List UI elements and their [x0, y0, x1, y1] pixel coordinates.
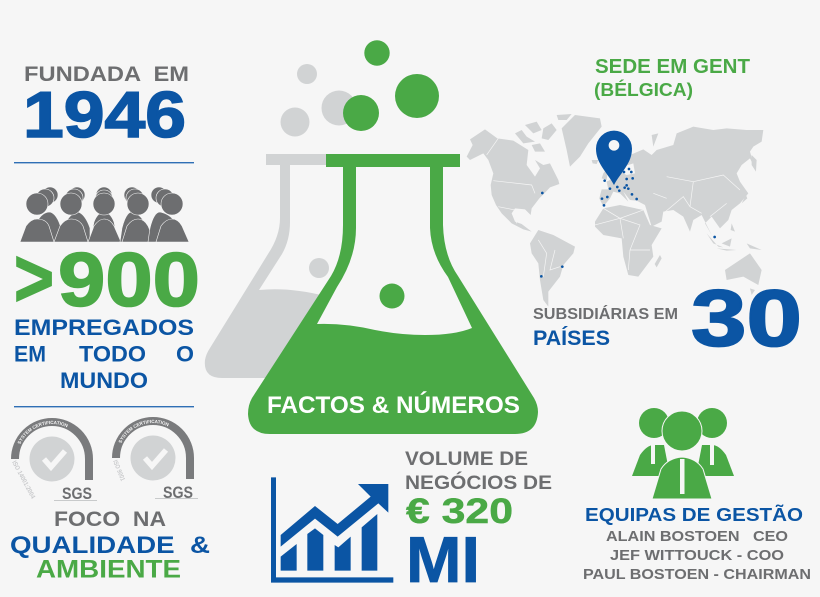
text: foco na qualidade e ambiente: QUALIDADE &	[10, 532, 210, 559]
text: subsidiarias em paises: SUBSIDIÁRIAS EM	[533, 304, 678, 323]
text: volume de negocios de: NEGÓCIOS DE	[405, 472, 552, 494]
label: factos e numeros: FACTOS & NÚMEROS	[267, 391, 520, 419]
text: volume de negocios de: VOLUME DE	[405, 449, 528, 470]
panel: employees	[14, 187, 200, 393]
icon: SGS ISO 9001 badge	[111, 417, 198, 502]
icon: SGS ISO 14001 badge	[10, 418, 97, 503]
text: empregados em todo o mundo: MUNDO	[60, 368, 148, 393]
icon: SGS ISO 9001 badge: SYSTEM CERTIFICATION	[118, 420, 169, 443]
icon: SGS ISO 14001 badge: SYSTEM CERTIFICATION	[18, 420, 68, 444]
icon: location pin	[596, 131, 632, 185]
illustration: flasks and bubbles	[205, 40, 538, 434]
text: team names: ALAIN BOSTOEN CEO	[606, 528, 788, 545]
text: team names: PAUL BOSTOEN - CHAIRMAN	[583, 566, 811, 583]
icon: green flask	[248, 154, 538, 434]
icon: SGS ISO 14001 badge: ISO 14001:2004	[10, 460, 36, 500]
bubbles: green	[343, 40, 439, 131]
heading: sede em gent: SEDE EM GENT	[595, 56, 750, 78]
map markers: subsidiaries	[540, 168, 716, 278]
number: more than 900	[14, 233, 200, 324]
number: more than 900: 900	[58, 238, 200, 323]
text: foco na qualidade e ambiente: AMBIENTE	[36, 556, 181, 584]
panel: management team	[583, 408, 811, 583]
icon: SGS ISO 14001 badge: SGS	[62, 484, 92, 503]
panel: headquarters	[467, 56, 802, 362]
text: empregados em todo o mundo: EMPREGADOS	[14, 315, 194, 340]
subheading: belgica: (BÉLGICA)	[594, 79, 693, 100]
number: 1946: 1946	[23, 78, 186, 151]
text: empregados em todo o mundo: EM	[14, 342, 46, 366]
icon: SGS ISO 9001 badge: ISO 9001	[111, 459, 126, 482]
icon: SGS ISO 9001 badge: SGS	[163, 483, 193, 502]
number: more than 900: >	[14, 233, 54, 324]
number: 320 euros: € 320	[406, 492, 513, 531]
icon: growth chart	[271, 477, 393, 583]
world map	[467, 114, 763, 307]
text: foco na qualidade e ambiente: FOCO NA	[54, 508, 166, 531]
text: subsidiarias em paises	[533, 304, 678, 350]
text: subsidiarias em paises: PAÍSES	[533, 327, 610, 350]
text: foco na qualidade e ambiente	[10, 508, 210, 584]
text: team names: JEF WITTOUCK - COO	[610, 547, 784, 564]
panel: revenue	[271, 449, 552, 596]
icon: three people	[632, 408, 734, 499]
text: team names	[583, 528, 811, 583]
icon: gray flask	[205, 64, 356, 378]
icon: crowd of people	[20, 187, 189, 242]
text: empregados em todo o mundo	[14, 315, 194, 393]
heading: fundada em: FUNDADA EM	[24, 63, 189, 86]
text: empregados em todo o mundo: O	[176, 342, 194, 366]
panel: founded	[23, 63, 189, 151]
text: volume de negocios de	[405, 449, 552, 494]
text: empregados em todo o mundo: TODO	[79, 342, 146, 366]
number: 30: 30	[691, 274, 802, 362]
number: mi: MI	[406, 523, 480, 596]
panel: certifications	[10, 417, 210, 584]
heading: equipas de gestao: EQUIPAS DE GESTÃO	[585, 504, 803, 525]
